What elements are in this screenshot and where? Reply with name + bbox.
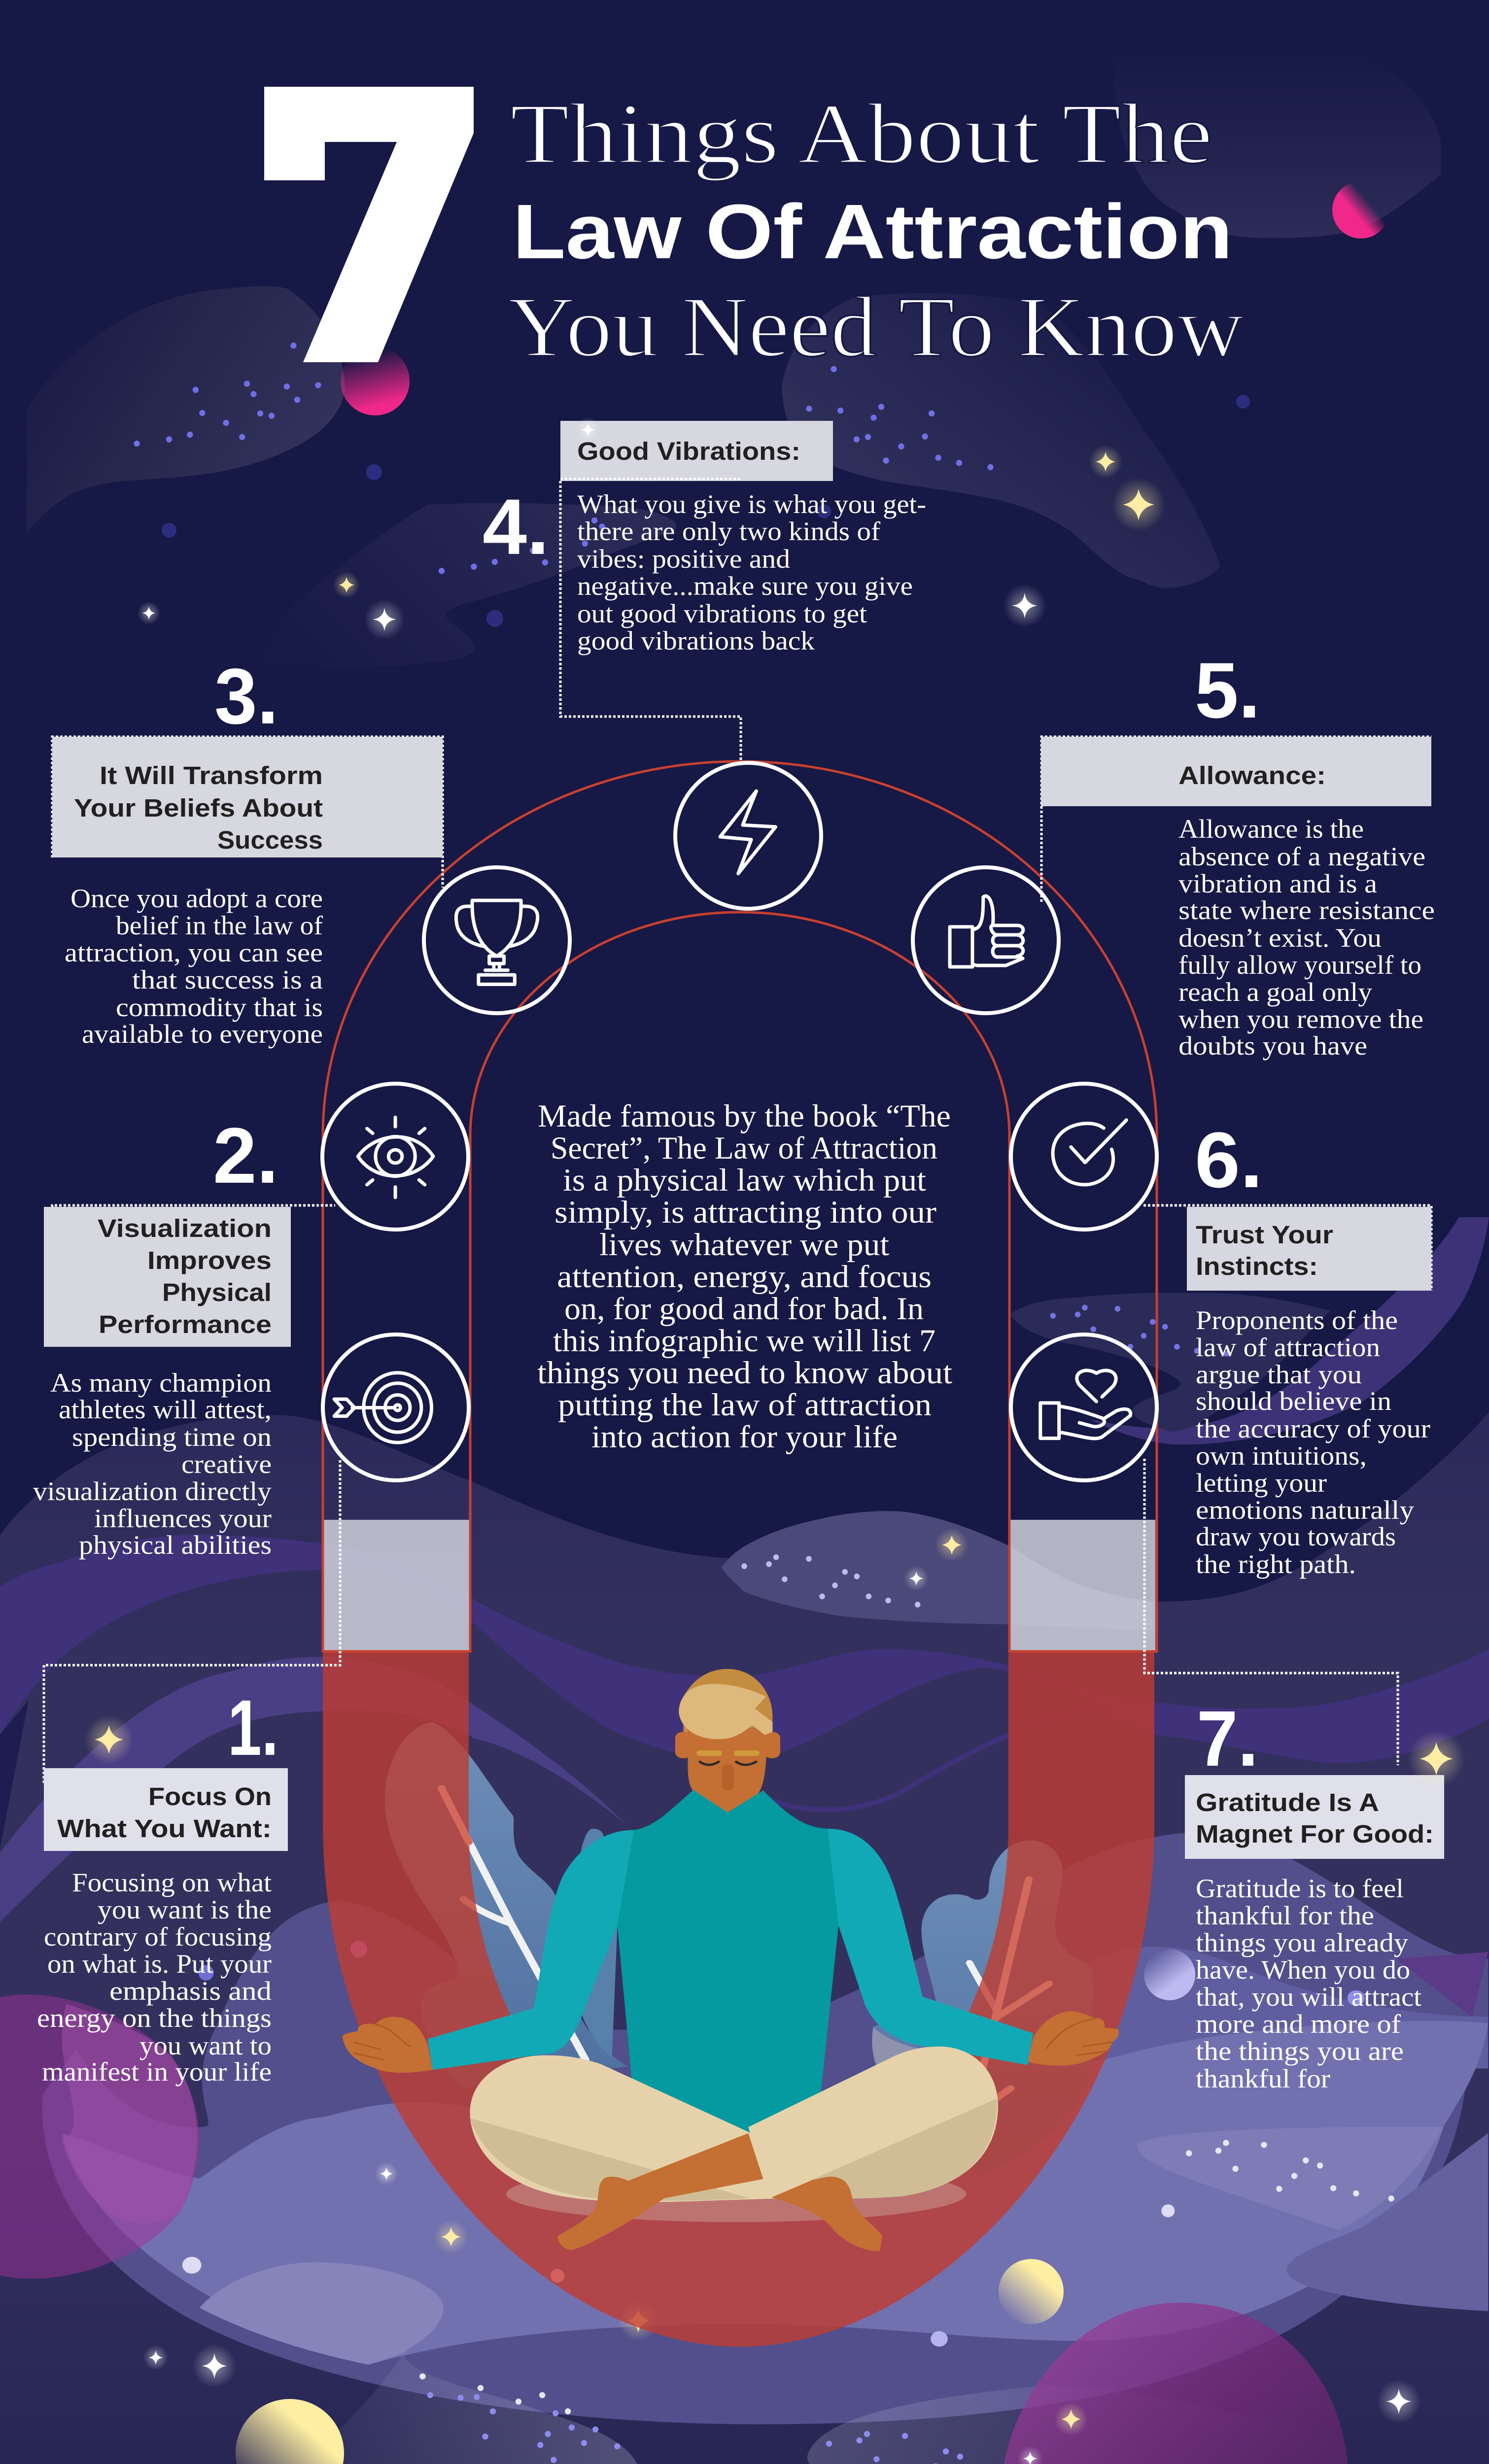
hand right	[1028, 2011, 1119, 2065]
body 3: that success is a	[132, 965, 323, 994]
dotted strip	[560, 478, 740, 480]
body 7: more and more of	[1196, 2009, 1401, 2039]
dots: centre nebula cluster	[741, 1554, 920, 1608]
icons	[334, 791, 1131, 1442]
leg left shade	[470, 2118, 749, 2201]
foot right	[771, 2177, 883, 2251]
number 7: 7.	[1197, 1694, 1258, 1782]
wave: thin ribbon	[761, 1710, 1183, 1810]
background nebula: centre left	[256, 503, 676, 669]
ears	[675, 1732, 780, 1758]
magnet red body	[323, 1651, 1154, 2347]
plant left	[384, 1722, 628, 2088]
body 1: emphasis and	[109, 1976, 272, 2006]
intro paragraph: is a physical law which put	[563, 1163, 926, 1198]
magnet arch outline	[323, 761, 1157, 1651]
heading box 1	[44, 1768, 288, 1851]
number 2: 2.	[213, 1111, 278, 1199]
body 2: creative	[181, 1449, 272, 1479]
leg right	[748, 2047, 998, 2199]
plant left stem	[442, 1788, 586, 2060]
intro paragraph: on, for good and for bad. In	[564, 1291, 924, 1327]
body 2: physical abilities	[79, 1530, 272, 1560]
icon: lightning bolt	[720, 791, 776, 874]
person meditating	[343, 1669, 1119, 2251]
heading 7: Gratitude Is A	[1196, 1788, 1379, 1816]
small red dots on magnet	[350, 1941, 564, 2283]
body 6	[1196, 1305, 1430, 1579]
star on heading	[1408, 1730, 1465, 1787]
nebula bottom left	[238, 2353, 642, 2464]
leg right shade	[771, 2098, 997, 2199]
body 6: draw you towards	[1196, 1522, 1396, 1551]
bowl lower right	[1286, 2133, 1488, 2311]
wave: left dark wedge	[0, 1700, 29, 1849]
big number 7	[264, 87, 474, 362]
body 2: As many champion	[50, 1368, 272, 1398]
nose	[722, 1765, 734, 1790]
body 1: you want is the	[98, 1895, 272, 1924]
background nebula: centre right	[782, 293, 1220, 588]
body 3	[65, 884, 323, 1049]
item 3	[52, 652, 443, 1049]
background nebula: top right	[1114, 47, 1441, 238]
body 5: vibration and is a	[1178, 869, 1377, 898]
number 1: 1.	[228, 1683, 278, 1772]
icon: thumbs up	[950, 896, 1023, 967]
body 5: when you remove the	[1178, 1004, 1423, 1034]
magnet pole left	[324, 1520, 470, 1651]
wave: lighter purple arc	[0, 1657, 626, 1922]
body 1: manifest in your life	[42, 2057, 272, 2087]
body 4: there are only two kinds of	[577, 516, 880, 546]
magnet plant overlay branches	[442, 1788, 1049, 2101]
body 5: Allowance is the	[1178, 814, 1364, 844]
face	[688, 1727, 767, 1813]
red star behind magnet	[618, 2300, 658, 2341]
title line 3: You Need To Know	[508, 279, 1244, 375]
hand finger lines	[353, 2018, 1112, 2060]
heading 2: Improves	[147, 1246, 272, 1274]
wave: swirl beside heart	[1010, 1293, 1331, 1432]
eyebrows	[696, 1750, 760, 1756]
icon circles	[322, 763, 1157, 1480]
lower bowl layers	[0, 1832, 1488, 2464]
intro paragraph: things you need to know about	[537, 1355, 952, 1391]
heading box 5	[1041, 737, 1431, 806]
heading 3: Your Beliefs About	[74, 794, 323, 822]
heading 7: Magnet For Good:	[1196, 1820, 1434, 1848]
heading 1	[57, 1782, 272, 1843]
title	[264, 86, 1244, 375]
foot left and ankle	[557, 2133, 763, 2250]
body 6: emotions naturally	[1196, 1495, 1414, 1525]
intro paragraph: this infographic we will list 7	[553, 1323, 935, 1359]
bowl outer	[42, 1832, 1488, 2424]
body 7: the things you are	[1196, 2036, 1404, 2066]
planet: pink top left	[341, 346, 410, 415]
heading box 6	[1187, 1207, 1431, 1291]
bowl highlight left	[200, 2262, 444, 2365]
body 1: on what is. Put your	[47, 1949, 272, 1979]
intro paragraph: into action for your life	[591, 1419, 898, 1455]
body 7: have. When you do	[1196, 1955, 1410, 1985]
dots: upper clusters	[134, 342, 994, 574]
heading 2	[98, 1214, 272, 1338]
heading box 7	[1185, 1775, 1444, 1859]
intro paragraph: simply, is attracting into our	[554, 1195, 936, 1230]
item 5	[1041, 646, 1435, 1061]
arm left	[428, 1830, 634, 2070]
heading 6	[1196, 1221, 1333, 1280]
bowl highlight right	[1137, 2127, 1444, 2230]
item 6	[1187, 1116, 1431, 1579]
hand left	[343, 2017, 433, 2073]
icon: heart in hand	[1040, 1370, 1131, 1438]
heading 6: Trust Your	[1196, 1221, 1333, 1249]
heading box 2	[44, 1207, 291, 1347]
intro paragraph: Secret”, The Law of Attraction	[551, 1130, 937, 1166]
body 7: Gratitude is to feel	[1196, 1874, 1404, 1903]
body 6: letting your	[1196, 1468, 1327, 1498]
heading 5: Allowance:	[1178, 761, 1326, 789]
body 1: you want to	[139, 2031, 272, 2060]
heading 1: Focus On	[148, 1782, 272, 1811]
body 5: doubts you have	[1178, 1031, 1367, 1061]
icon: target and arrow	[334, 1373, 432, 1442]
body 5	[1178, 814, 1435, 1061]
body 4: What you give is what you get-	[577, 489, 926, 519]
magnet pole right	[1009, 1520, 1155, 1651]
connector dotted lines	[44, 481, 1431, 1784]
body 4: good vibrations back	[577, 626, 815, 655]
bowl inner	[62, 2021, 1488, 2365]
body 5: state where resistance	[1178, 895, 1435, 925]
intro paragraph: lives whatever we put	[599, 1227, 889, 1263]
heading box 4	[560, 421, 833, 481]
body 2	[33, 1368, 272, 1560]
item 4	[483, 417, 926, 655]
heading 7	[1196, 1788, 1434, 1848]
icon: trophy	[456, 900, 538, 984]
body 5: fully allow yourself to	[1178, 950, 1421, 980]
number 4: 4.	[483, 482, 549, 571]
item 2	[33, 1111, 291, 1560]
plants behind magnet	[384, 1722, 1093, 2176]
plant right grain patch	[872, 2027, 920, 2066]
body 6: the right path.	[1196, 1549, 1356, 1579]
magnet	[323, 761, 1157, 2347]
planet: pink top right	[1332, 181, 1389, 239]
heading 1: What You Want:	[57, 1814, 272, 1843]
number 3: 3.	[214, 652, 278, 740]
intro paragraph: Made famous by the book “The	[538, 1098, 951, 1134]
arm right	[828, 1829, 1033, 2065]
wave: centre translucent nebula	[722, 1511, 1153, 1631]
body 3: Once you adopt a core	[70, 884, 323, 913]
body 7	[1196, 1874, 1421, 2093]
background nebula: top left	[27, 286, 345, 533]
heading 2: Visualization	[98, 1214, 272, 1242]
body 3: belief in the law of	[116, 911, 323, 940]
number 5: 5.	[1195, 646, 1260, 734]
magenta blob left highlight	[62, 2004, 197, 2224]
nebula bottom right	[807, 2386, 1349, 2464]
body 6: own intuitions,	[1196, 1441, 1367, 1471]
body 4: out good vibrations to get	[577, 599, 867, 628]
magenta blob right	[1002, 2303, 1349, 2464]
body 3: commodity that is	[116, 992, 323, 1022]
intro paragraph: attention, energy, and focus	[557, 1259, 932, 1295]
title line 2: Law Of Attraction	[513, 189, 1233, 275]
body 1: Focusing on what	[72, 1868, 272, 1897]
heading 2: Performance	[99, 1310, 272, 1338]
heading box 3	[52, 737, 443, 857]
icon: eye	[358, 1117, 433, 1198]
body 7: things you already	[1196, 1928, 1408, 1957]
body 1: energy on the things	[37, 2003, 272, 2033]
body 4	[577, 489, 926, 655]
dots: large	[182, 1965, 1365, 2464]
hair back	[684, 1669, 772, 1734]
body 5: absence of a negative	[1178, 842, 1425, 871]
body 2: spending time on	[72, 1422, 272, 1452]
body 6: argue that you	[1196, 1360, 1362, 1389]
plant right	[872, 1841, 1093, 2176]
body 6: law of attraction	[1196, 1333, 1380, 1362]
body 7: that, you will attract	[1196, 1982, 1421, 2012]
body 1	[37, 1868, 272, 2087]
leg left	[470, 2055, 782, 2202]
stars: white	[137, 584, 1420, 2464]
body 2: visualization directly	[33, 1476, 272, 1506]
title line 1: Things About The	[510, 86, 1212, 181]
planet: lilac	[1144, 1949, 1195, 2000]
eyes	[700, 1762, 756, 1765]
body 5: doesn’t exist. You	[1178, 923, 1382, 953]
body 3: attraction, you can see	[65, 938, 323, 967]
wave: right purple stripe	[1089, 1217, 1489, 1444]
dots: white	[419, 2140, 1394, 2414]
body 2: athletes will attest,	[59, 1395, 272, 1424]
planet: pale yellow right	[999, 2259, 1064, 2324]
heading 3: Success	[217, 826, 323, 854]
body 6: Proponents of the	[1196, 1305, 1398, 1335]
body 7: thankful for	[1196, 2064, 1330, 2093]
heading 3	[74, 761, 323, 854]
wave: purple band	[0, 1534, 1489, 1763]
heading 4: Good Vibrations:	[577, 437, 800, 465]
planet: pale yellow bottom left	[236, 2399, 344, 2464]
intro paragraph: putting the law of attraction	[558, 1387, 932, 1423]
body 3: available to everyone	[82, 1019, 323, 1049]
magenta blob left	[0, 1994, 199, 2279]
body 6: the accuracy of your	[1196, 1414, 1430, 1443]
torso	[618, 1790, 838, 2133]
intro paragraph	[537, 1098, 952, 1455]
wave lavender right	[1044, 1947, 1488, 2069]
plant left back leaf	[568, 1829, 628, 2057]
stars: yellow	[85, 445, 1165, 2436]
heading 2: Physical	[162, 1278, 272, 1306]
number 6: 6.	[1195, 1116, 1263, 1204]
body 7: thankful for the	[1196, 1901, 1374, 1930]
body 6: should believe in	[1196, 1386, 1391, 1416]
heading 6: Instincts:	[1196, 1252, 1318, 1280]
body 5: reach a goal only	[1178, 977, 1372, 1007]
item 1	[37, 1683, 288, 2087]
dots: blue	[427, 2392, 1000, 2464]
body 4: vibes: positive and	[577, 544, 790, 574]
body 2: influences your	[94, 1504, 272, 1533]
icon: check mark	[1053, 1120, 1126, 1185]
item 7	[1185, 1694, 1465, 2093]
dots: dark blue large	[162, 395, 1250, 627]
lower background waves	[0, 1412, 1489, 2464]
star on box	[576, 417, 600, 443]
heading 3: It Will Transform	[100, 761, 323, 789]
floor shadow	[506, 2166, 966, 2222]
body 4: negative...make sure you give	[577, 571, 913, 601]
dots: heart-side cluster	[1050, 1305, 1229, 1357]
plant right stems	[970, 1963, 998, 2014]
body 1: contrary of focusing	[44, 1922, 272, 1951]
magenta wedge right	[1396, 1952, 1488, 2017]
hair front	[679, 1684, 772, 1739]
